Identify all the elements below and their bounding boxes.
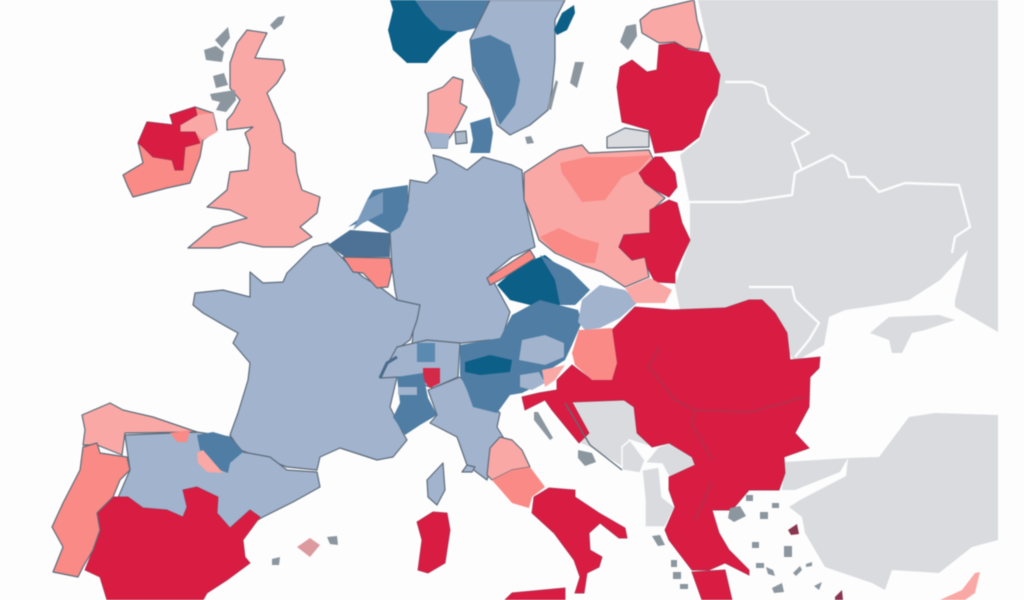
Austria and north-east Italy — [460, 300, 582, 413]
Netherlands — [348, 185, 408, 233]
Ireland — [123, 107, 217, 197]
Latvia and Lithuania — [617, 43, 720, 153]
Switzerland and Alps regions — [380, 340, 460, 435]
Estonia — [640, 0, 702, 50]
France — [193, 243, 420, 470]
United Kingdom — [188, 30, 320, 248]
Bosnia, Montenegro, Kosovo, Macedonia, Albania — [572, 400, 695, 527]
Germany — [390, 155, 535, 345]
Hungary — [572, 328, 617, 380]
Sweden — [470, 0, 575, 135]
Belgium — [328, 230, 392, 288]
eastern Slovakia — [625, 278, 672, 303]
Turkey — [782, 413, 998, 590]
Balearic islands — [272, 536, 338, 565]
Poland — [524, 145, 690, 287]
Scottish islands — [204, 16, 285, 112]
Iberia: Spain — [82, 403, 320, 600]
Greek islands — [652, 495, 843, 600]
Italy north — [428, 377, 503, 480]
Sardinia — [417, 512, 450, 573]
non-member countries: east — [675, 0, 998, 362]
Kaliningrad — [607, 128, 649, 148]
Czech Republic — [487, 250, 590, 305]
Croatian coast line and islands — [534, 403, 622, 470]
Norway — [388, 0, 490, 63]
Portugal — [52, 443, 130, 577]
Italy south — [487, 437, 627, 600]
Cyprus — [940, 572, 980, 600]
Baltic islands — [525, 24, 637, 144]
south-east Europe: Croatia, Romania, Bulgaria, Greece — [522, 300, 820, 600]
Denmark — [425, 77, 493, 153]
Slovakia — [578, 285, 638, 330]
Corsica — [427, 463, 445, 505]
